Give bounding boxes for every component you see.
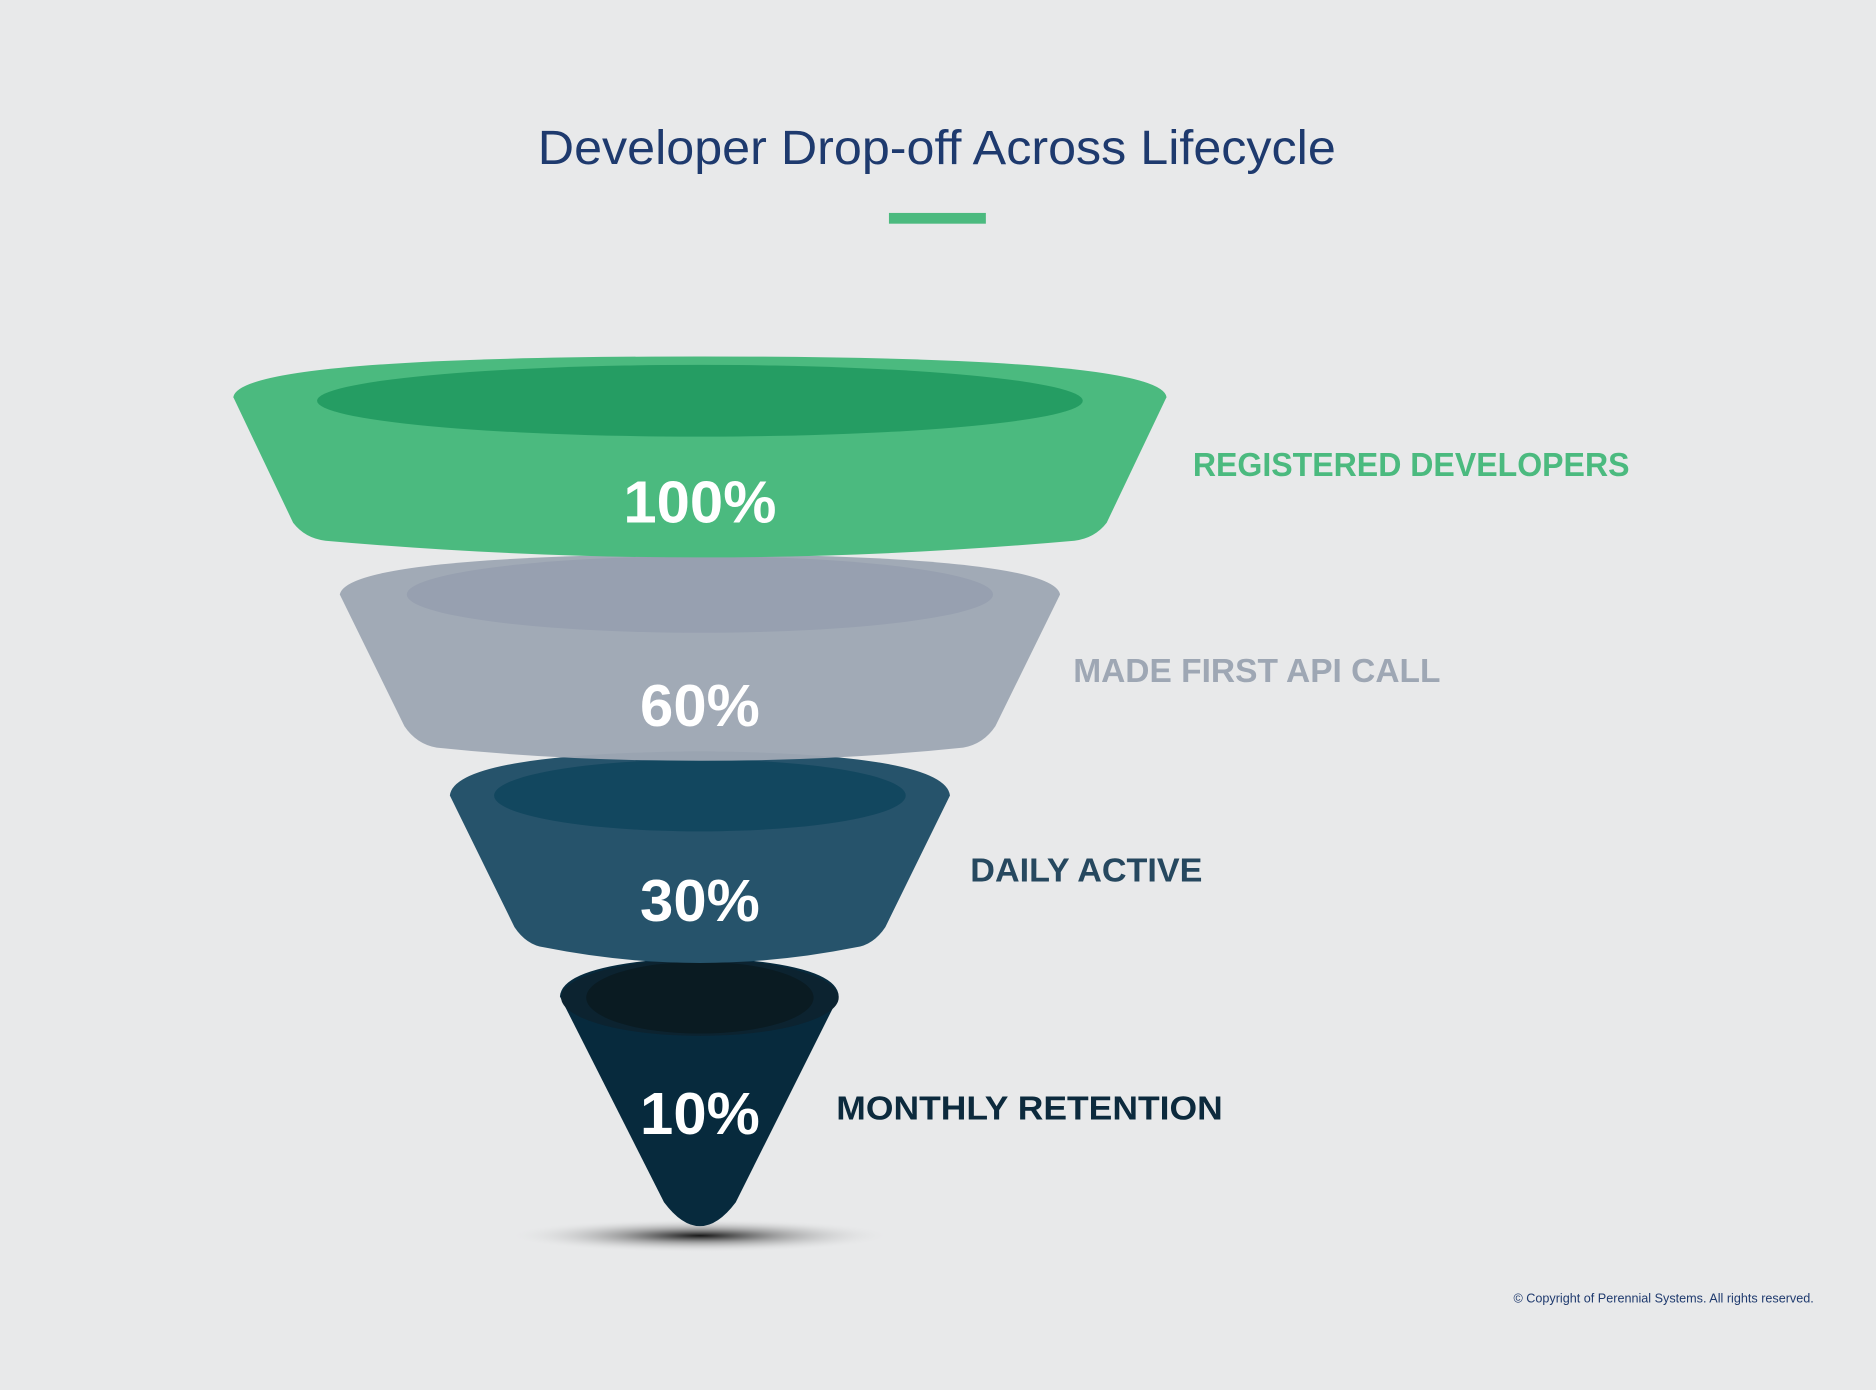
title underline accent bbox=[889, 213, 986, 224]
funnel stage 4: monthly retention: 10% bbox=[640, 1080, 760, 1147]
label: registered developers: REGISTERED DEVELOPERS bbox=[1193, 447, 1630, 484]
label: daily active: DAILY ACTIVE bbox=[970, 853, 1202, 890]
title: Developer Drop-off Across Lifecycle bbox=[538, 122, 1336, 175]
label: monthly retention: MONTHLY RETENTION bbox=[836, 1091, 1223, 1128]
funnel stage 2: made first api call: 60% bbox=[640, 672, 760, 739]
funnel stage 1: registered developers: 100% bbox=[623, 469, 776, 536]
shadow under funnel bbox=[508, 1219, 891, 1252]
label: made first api call: MADE FIRST API CALL bbox=[1073, 653, 1440, 690]
funnel stage 3: daily active bbox=[450, 751, 950, 963]
funnel stage 4: monthly retention bbox=[560, 957, 839, 1226]
copyright: © Copyright of Perennial Systems. All rights reserved. bbox=[1513, 1291, 1814, 1306]
funnel stage 1: registered developers bbox=[233, 356, 1167, 557]
funnel stage 2: made first api call bbox=[340, 554, 1060, 761]
funnel stage 3: daily active: 30% bbox=[640, 867, 760, 934]
